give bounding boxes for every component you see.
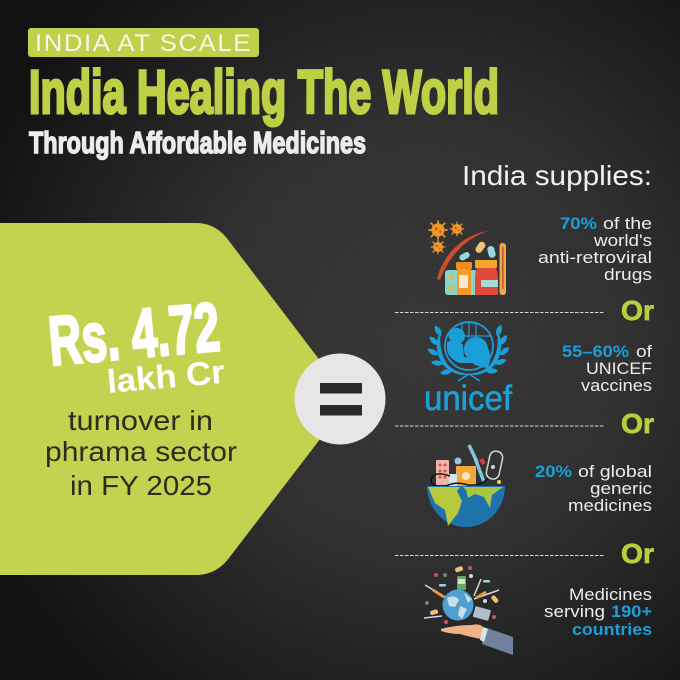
text: anti-retroviral drugs [538,215,652,284]
text: UNICEF vaccines: vaccines [581,377,652,395]
heading: India supplies: India supplies: [462,160,652,191]
unit: lakh Cr: lakh Cr [105,353,226,400]
text: generic medicines: 20% [535,463,572,481]
text: UNICEF vaccines: UNICEF [586,360,652,378]
icon: UNICEF logo: unicef [424,379,512,418]
text: generic medicines: medicines [568,497,652,515]
text: UNICEF vaccines [562,343,652,395]
icon: UNICEF logo [424,322,512,418]
text: UNICEF vaccines: 55–60% [562,343,629,361]
turnover description: turnover in [68,405,213,436]
text: generic medicines: generic [590,480,652,498]
icon: medicines and viruses [428,220,506,295]
text: anti-retroviral drugs: world's [593,232,652,250]
text: anti-retroviral drugs: 70% [560,215,597,233]
headline figure: Rs. 4.72: Rs. 4.72 [46,288,223,380]
text: generic medicines [535,463,652,515]
text: countries served: countries [572,621,652,639]
text: countries served: serving [544,603,605,621]
turnover description: phrama sector [45,436,237,467]
turnover description [45,405,237,501]
panel: turnover arrow [0,223,350,575]
text: anti-retroviral drugs: drugs [604,266,652,284]
text: countries served: 190+ [611,603,652,621]
divider with Or 2: Or [621,408,654,439]
divider with Or 3: Or [621,538,654,569]
icon: equals sign [294,354,386,444]
text: anti-retroviral drugs: anti-retroviral [538,249,652,267]
icon: hand holding globe and medicines [424,566,513,655]
text: anti-retroviral drugs: of the [603,215,652,233]
divider with Or 1: Or [621,295,654,326]
text: countries served: Medicines [569,586,652,604]
text: generic medicines: of global [578,463,652,481]
turnover description: in FY 2025 [70,470,212,501]
icon: half globe with medical supplies [427,445,505,527]
badge: INDIA AT SCALE: INDIA AT SCALE [35,30,252,57]
subtitle: Through Affordable Medicines [29,125,366,160]
text: UNICEF vaccines: of [636,343,652,361]
text: countries served [544,586,652,639]
